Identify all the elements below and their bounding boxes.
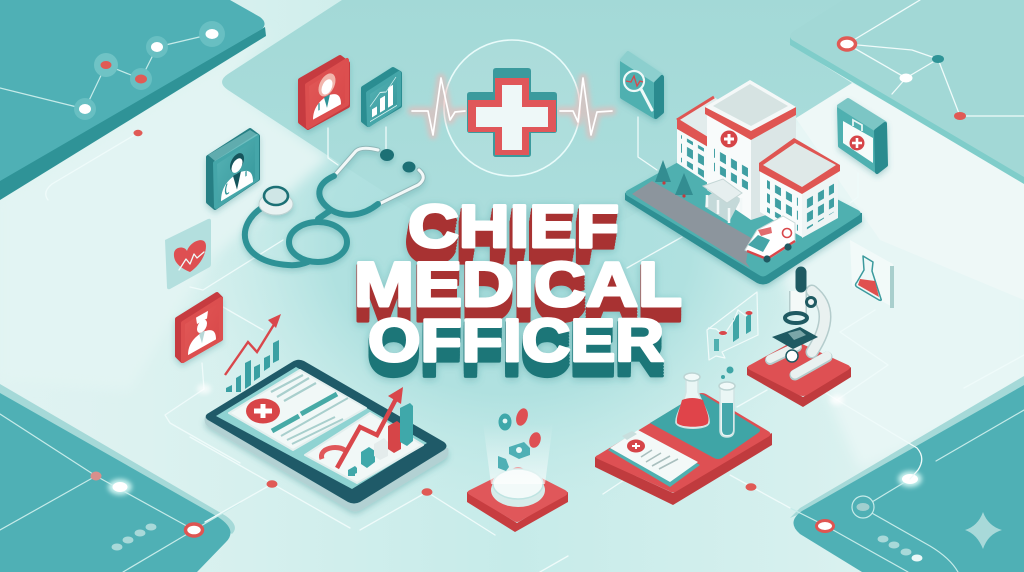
tube	[789, 291, 807, 315]
stethoscope	[245, 148, 423, 265]
icon tile: teal chart	[363, 69, 400, 125]
person	[313, 67, 341, 120]
holographic pedestal with floating icons	[467, 407, 568, 532]
title word: medical: MEDICAL	[354, 256, 682, 326]
bars	[348, 403, 413, 476]
arrow	[225, 314, 281, 375]
title word: chief: CHIEF	[408, 193, 619, 260]
portico	[703, 179, 742, 223]
title word: chief: CHIEF	[407, 197, 618, 264]
heartbeat lines	[412, 78, 612, 135]
flask platform	[595, 366, 772, 505]
title word: officer: OFFICER	[368, 322, 664, 389]
floating chart pane	[707, 292, 758, 360]
node: network points	[838, 38, 966, 120]
connector lines	[46, 117, 1024, 572]
main tower	[705, 80, 796, 220]
icon tile: red nurse	[177, 294, 221, 361]
tubing	[245, 176, 378, 265]
icon tile: teal doctor	[208, 130, 258, 208]
chart card	[305, 387, 423, 483]
title word: medical: MEDICAL	[354, 253, 682, 323]
flask	[676, 373, 709, 428]
title word: medical: MEDICAL	[354, 259, 682, 329]
title word: officer: OFFICER	[368, 313, 664, 380]
ambulance	[745, 216, 795, 263]
ring	[444, 40, 580, 176]
test tube	[719, 382, 735, 437]
dots	[112, 524, 156, 550]
flask	[856, 256, 881, 300]
title word: chief: CHIEF	[406, 206, 616, 273]
title word: chief: CHIEF	[406, 200, 618, 267]
base platform	[625, 140, 862, 284]
icon tile: red doctor	[300, 57, 348, 128]
cross	[467, 68, 557, 157]
icon: red cross	[246, 398, 280, 424]
left wing	[677, 97, 735, 183]
title word: medical: MEDICAL	[354, 250, 682, 320]
ear tips	[380, 149, 416, 172]
title word: chief: CHIEF	[405, 209, 616, 276]
cross badge	[720, 130, 738, 148]
title word: officer: OFFICER	[368, 310, 664, 377]
node: network points	[74, 21, 225, 120]
title word: officer: OFFICER	[368, 319, 664, 386]
node: network points	[90, 472, 202, 536]
trees	[655, 160, 693, 198]
chest piece	[259, 187, 293, 215]
hospital building	[625, 80, 862, 284]
teal board	[650, 394, 760, 459]
node: red dots	[134, 130, 756, 496]
tablet dashboard	[205, 360, 449, 511]
central emblem: medical cross with heartbeat	[412, 40, 612, 176]
panel: bottom right corner network	[780, 376, 1024, 572]
icon tile: medical kit	[839, 100, 886, 172]
ear tubes	[335, 148, 423, 203]
road	[632, 181, 760, 268]
title word: officer: OFFICER	[368, 316, 664, 383]
title: chief medical officer	[354, 193, 682, 389]
node: network points	[816, 471, 922, 532]
title word: medical: MEDICAL	[354, 262, 682, 332]
arrow	[337, 387, 403, 468]
panel: top left corner network	[0, 0, 266, 200]
donut	[321, 448, 346, 459]
title word: chief: CHIEF	[406, 203, 617, 270]
icon: sparkle	[965, 512, 1002, 549]
title word: medical: MEDICAL	[354, 265, 682, 335]
clipboard	[608, 430, 700, 487]
light beam	[483, 423, 553, 484]
icon tile: magnifier	[622, 53, 662, 117]
icon pane: heart	[165, 219, 211, 289]
microscope	[770, 272, 827, 375]
document card	[229, 370, 366, 450]
panel: bottom left corner network	[0, 384, 240, 572]
microscope on red platform	[747, 272, 851, 407]
heart	[174, 240, 206, 272]
dots	[878, 536, 922, 562]
title word: chief	[405, 193, 619, 276]
small bar chart with rising arrow	[225, 314, 281, 392]
floating icons	[498, 407, 543, 471]
icon pane: flask	[850, 240, 894, 308]
title word: officer: OFFICER	[368, 307, 664, 374]
right wing	[759, 138, 840, 238]
feet and arm	[770, 291, 827, 375]
bubbles	[721, 366, 734, 379]
panel: top right corner network	[790, 0, 1024, 184]
